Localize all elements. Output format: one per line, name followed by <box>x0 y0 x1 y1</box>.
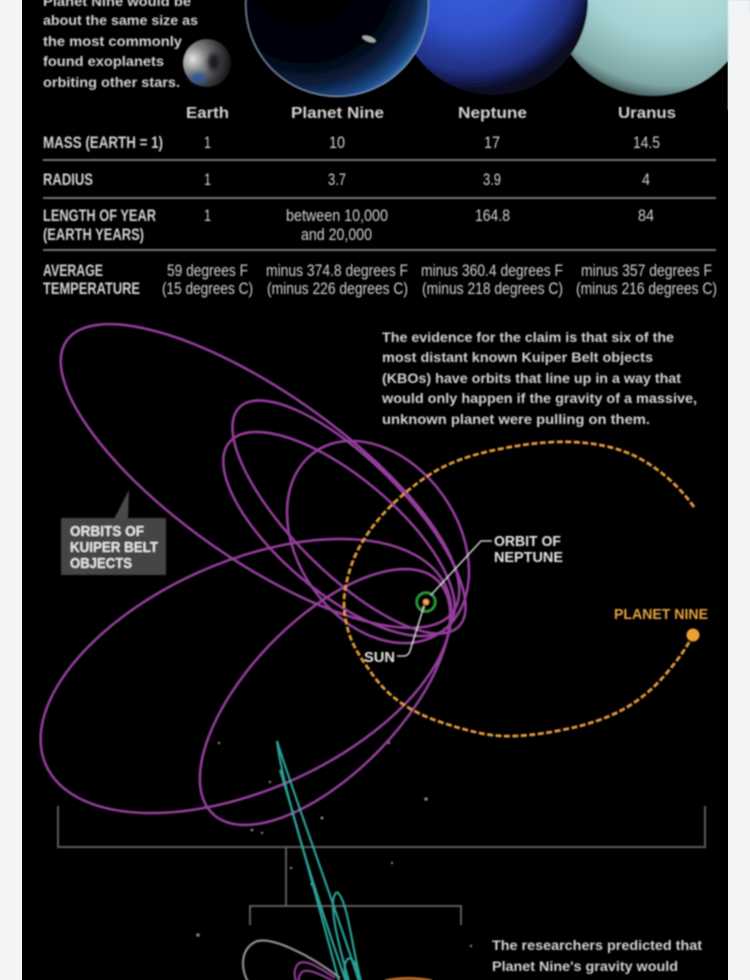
evidence paragraph <box>381 330 697 427</box>
prediction text: Planet Nine's gravity would <box>492 959 678 974</box>
row: radius: 1 <box>204 170 211 189</box>
row: radius: RADIUS <box>43 170 93 189</box>
orbits of Kuiper Belt objects <box>0 272 507 869</box>
evidence paragraph: (KBOs) have orbits that line up in a way that <box>382 371 682 386</box>
table header <box>186 105 676 122</box>
callout: orbits of Kuiper Belt objects: OBJECTS <box>70 555 132 572</box>
intro text: about the same size as <box>43 13 198 28</box>
row: average temperature <box>43 261 717 298</box>
table header: Uranus <box>618 105 676 122</box>
table header: Neptune <box>458 105 527 122</box>
row: radius <box>43 170 650 189</box>
table header: Planet Nine <box>291 105 384 122</box>
row: length of year: LENGTH OF YEAR <box>43 206 156 225</box>
label: Sun <box>364 606 424 666</box>
label: orbit of Neptune: NEPTUNE <box>494 549 563 566</box>
row: radius: 3.9 <box>483 170 501 189</box>
row: average temperature: (15 degrees C) <box>162 279 253 298</box>
intro text <box>43 0 198 90</box>
prediction text: The researchers predicted that <box>492 938 703 953</box>
evidence paragraph: The evidence for the claim is that six of the <box>382 330 675 345</box>
evidence paragraph: most distant known Kuiper Belt objects <box>382 350 653 365</box>
row: average temperature: minus 357 degrees F <box>581 261 712 280</box>
intro text: the most commonly <box>43 34 183 49</box>
row: average temperature: 59 degrees F <box>167 261 248 280</box>
inner orbits <box>243 941 340 980</box>
label: orbit of Neptune <box>431 533 563 595</box>
planet: Neptune <box>398 0 588 95</box>
evidence paragraph: unknown planet were pulling on them. <box>382 412 650 427</box>
planets illustration <box>183 0 750 110</box>
label: Sun: SUN <box>364 649 395 666</box>
background stars <box>196 742 472 947</box>
row: length of year <box>43 206 654 244</box>
comparison table <box>43 105 717 298</box>
callout: orbits of Kuiper Belt objects: ORBITS OF <box>70 523 144 540</box>
row: radius: 4 <box>642 170 650 189</box>
label: orbit of Neptune: ORBIT OF <box>494 533 561 550</box>
bracket: zoom to inner solar system <box>58 806 705 925</box>
evidence paragraph: would only happen if the gravity of a massive, <box>381 391 697 406</box>
icon: Planet Nine position <box>686 628 700 642</box>
orange orbit segment <box>385 978 432 980</box>
row: average temperature: TEMPERATURE <box>43 279 140 298</box>
row: length of year: 1 <box>204 206 211 225</box>
planet: Uranus <box>552 0 750 96</box>
row: length of year: (EARTH YEARS) <box>43 225 144 244</box>
row: length of year: 164.8 <box>475 206 510 225</box>
row: average temperature: (minus 218 degrees C) <box>422 279 563 298</box>
planet: Planet Nine <box>245 0 429 97</box>
row: average temperature: minus 374.8 degrees F <box>266 261 408 280</box>
row: average temperature: (minus 226 degrees C) <box>267 279 408 298</box>
intro text: orbiting other stars. <box>43 75 180 90</box>
row: mass: 17 <box>484 133 500 152</box>
row: radius: 3.7 <box>328 170 346 189</box>
prediction text <box>492 938 703 974</box>
icon: Neptune orbit ring and Sun <box>416 592 436 612</box>
intro text: found exoplanets <box>43 54 164 69</box>
page margin beside Uranus <box>728 0 750 110</box>
row: mass: MASS (EARTH = 1) <box>43 133 163 152</box>
teal orbits <box>277 741 362 980</box>
row: mass: 1 <box>204 133 211 152</box>
row: mass <box>43 133 660 152</box>
row: length of year: 84 <box>638 206 654 225</box>
row: length of year: and 20,000 <box>301 225 372 244</box>
row: average temperature: minus 360.4 degrees F <box>421 261 563 280</box>
label: Planet Nine: PLANET NINE <box>614 606 708 623</box>
callout: orbits of Kuiper Belt objects: KUIPER BELT <box>70 539 158 556</box>
row: length of year: between 10,000 <box>286 206 388 225</box>
row: average temperature: AVERAGE <box>43 261 103 280</box>
row: mass: 10 <box>329 133 345 152</box>
orbit of Planet Nine <box>344 442 694 736</box>
planet: Earth <box>183 39 231 87</box>
row: average temperature: (minus 216 degrees C) <box>576 279 717 298</box>
callout: orbits of Kuiper Belt objects <box>61 490 166 575</box>
table header: Earth <box>186 105 229 122</box>
row: mass: 14.5 <box>633 133 660 152</box>
